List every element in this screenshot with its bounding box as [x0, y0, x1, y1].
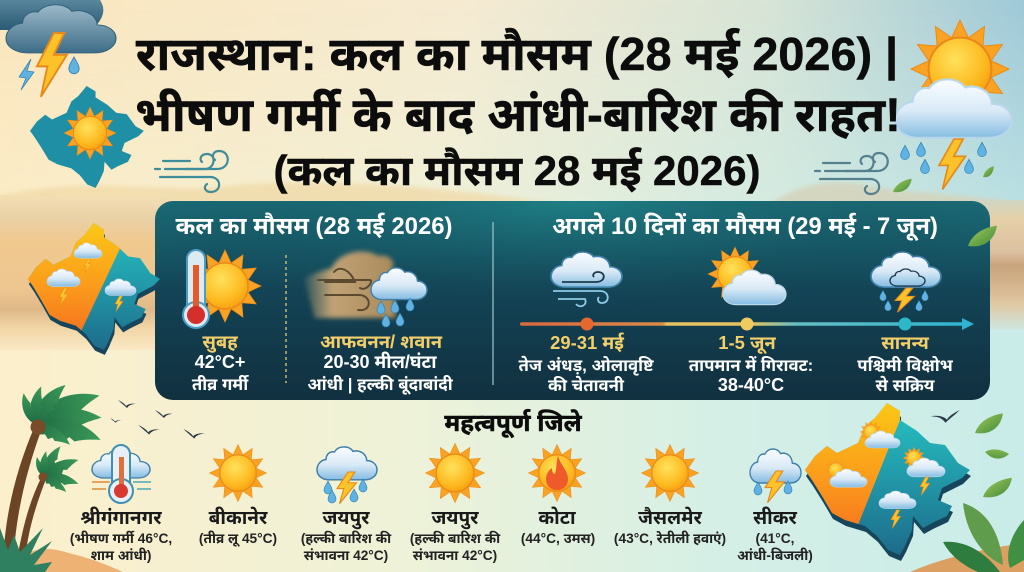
map: mid-left Rajasthan [28, 223, 164, 355]
icon: storm cloud top left [0, 0, 116, 97]
heading: next 10 days: अगले 10 दिनों का मौसम (29 मई - 7 जून) [552, 212, 938, 241]
district: Sikar: सीकर [753, 507, 797, 529]
icon: windy cloud [551, 252, 622, 306]
text: wind: 20-30 मील/घंटा [324, 352, 437, 372]
district: Sikar: (41°C, [756, 531, 794, 546]
district: Jaipur sun: (हल्की बारिश की [410, 530, 501, 546]
timeline arrow [520, 318, 974, 330]
district: Jaipur sun: जयपुर [431, 508, 479, 530]
district: Sikar: आंधी-बिजली) [737, 547, 813, 563]
district: Jaipur rain: संभावना 42°C) [304, 547, 388, 563]
heading: tomorrow: कल का मौसम (28 मई 2026) [176, 212, 452, 240]
text: morning [192, 331, 249, 394]
text: 1-5 June: 38-40°C [718, 375, 784, 395]
text: morning: 42°C+ [195, 352, 245, 372]
icon: wind right [815, 153, 888, 194]
text: morning: तीव्र गर्मी [192, 374, 249, 394]
panel: weather forecast [155, 201, 990, 400]
district: Jaipur rain: जयपुर [322, 508, 370, 530]
district: Kota [521, 444, 595, 546]
district: Sri Ganganagar: श्रीगंगानगर [80, 507, 162, 529]
district: Sri Ganganagar: शाम आंधी) [91, 547, 151, 563]
icon: thermometer and sun [183, 250, 261, 328]
district: Sri Ganganagar: (भीषण गर्मी 46°C, [70, 530, 172, 546]
map: bottom right Rajasthan [805, 403, 975, 561]
palm trees [0, 381, 123, 572]
icon: sun with cloud [708, 247, 786, 305]
icon: wind left [155, 151, 228, 192]
map: top left Rajasthan with sun [30, 86, 144, 188]
district: Jaipur rain: (हल्की बारिश की [301, 530, 392, 546]
text: morning: सुबह [202, 331, 238, 354]
text: 29-31 May: की चेतावनी [548, 375, 625, 395]
text: 1-5 June [689, 332, 813, 395]
text: 1-5 June: तापमान में गिरावट: [689, 355, 813, 375]
district: Jaipur sun [410, 444, 501, 563]
text: 29-31 May: 29-31 मई [550, 332, 625, 353]
district: Kota: (44°C, उमस) [521, 531, 595, 546]
district: Sikar [737, 449, 813, 563]
text: 1-5 June: 1-5 जून [718, 332, 776, 355]
title: भीषण गर्मी के बाद आंधी-बारिश की राहत! [135, 88, 901, 141]
text: wind: आंधी | हल्की बूंदाबांदी [307, 374, 454, 396]
district: Jaisalmer: (43°C, रेतीली हवाएं) [614, 529, 726, 546]
district: Bikaner: (तीव्र लू 45°C) [199, 530, 277, 548]
leaf on panel edge [968, 226, 997, 246]
district: Bikaner: बीकानेर [209, 506, 268, 529]
icon: sun and rain cloud top right [893, 20, 1012, 192]
icon: dust storm and rain [305, 252, 427, 327]
text: normal: पश्चिमी विक्षोभ [857, 355, 954, 375]
icon: thunder cloud [871, 252, 941, 312]
district: Bikaner [199, 444, 277, 548]
district: Kota: कोटा [538, 507, 576, 529]
district: Jaisalmer: जैसलमेर [638, 506, 702, 529]
text: normal [857, 332, 954, 395]
birds [110, 400, 960, 439]
title: (कल का मौसम 28 मई 2026) [274, 147, 760, 194]
text: 29-31 May [518, 332, 654, 395]
district: Jaipur sun: संभावना 42°C) [413, 547, 497, 563]
district: Jaipur rain [301, 447, 392, 563]
text: 29-31 May: तेज अंधड़, ओलावृष्टि [518, 355, 654, 376]
title [135, 28, 901, 194]
district: Jaisalmer [614, 444, 726, 546]
text: normal: से सक्रिय [876, 375, 935, 395]
leaves and plant bottom right [910, 413, 1024, 572]
title: राजस्थान: कल का मौसम (28 मई 2026) | [136, 28, 898, 80]
text: wind [307, 331, 454, 396]
text: wind: आफवनन/ शवान [320, 331, 443, 352]
text: normal: सानन्य [881, 332, 929, 353]
heading: important districts: महत्वपूर्ण जिले [444, 409, 583, 438]
district: Sri Ganganagar [70, 445, 172, 563]
